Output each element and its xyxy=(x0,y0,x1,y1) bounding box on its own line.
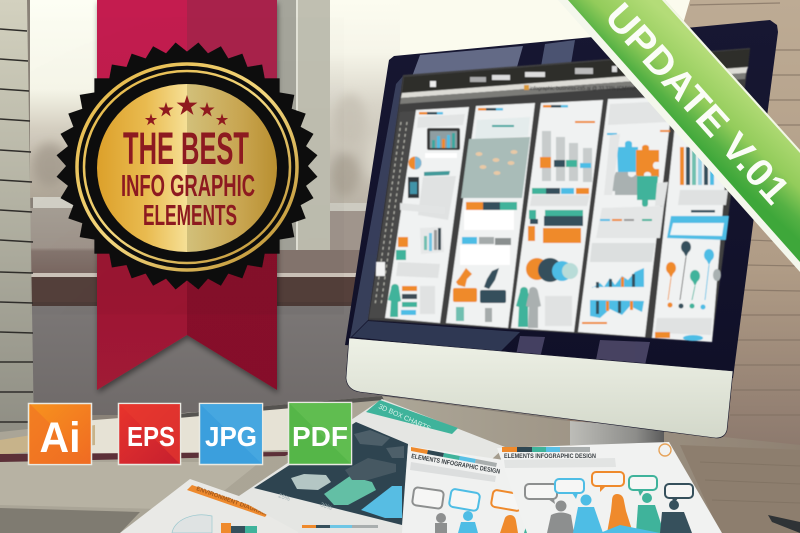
right wall with blinds xyxy=(560,0,800,445)
badge subheading: INFO GRAPHIC xyxy=(121,168,255,203)
bezel reflections xyxy=(350,40,650,365)
monitor xyxy=(345,20,778,438)
icon: PDF xyxy=(288,402,352,464)
hex boxes: 30% xyxy=(319,502,333,512)
speech bubbles xyxy=(525,472,693,504)
monitor stand xyxy=(570,421,664,446)
application toolbar: infographic-business-cs5.ai @ 33.33% (CMYK/Preview) xyxy=(530,86,654,92)
tools column xyxy=(369,111,415,318)
page 1 xyxy=(385,107,469,323)
colour stripes xyxy=(411,447,497,467)
icon: JPG xyxy=(200,404,262,464)
screen xyxy=(368,48,750,342)
colour stripes xyxy=(502,447,590,452)
icon: Ai: Ai xyxy=(40,414,80,462)
dark chart panel xyxy=(254,422,408,525)
puzzle pieces xyxy=(609,141,659,207)
application toolbar xyxy=(400,49,750,104)
gold rings xyxy=(77,64,297,270)
paper: middle people sheet xyxy=(402,446,540,533)
gold disc xyxy=(97,84,277,252)
page 4: puzzle xyxy=(578,97,673,337)
update banner xyxy=(558,0,800,272)
page 5: balloons xyxy=(652,97,732,342)
page 3 xyxy=(511,100,603,332)
paper: 3D box charts sheet xyxy=(236,399,505,533)
sheet header: 3D BOX CHARTS xyxy=(377,403,432,433)
sheet header xyxy=(366,400,458,434)
five stars xyxy=(145,95,228,125)
icon: EPS: EPS xyxy=(127,421,175,452)
badge xyxy=(57,42,317,290)
logo circle xyxy=(659,444,671,456)
people silhouettes xyxy=(547,493,692,533)
sheet heading: ELEMENTS INFOGRAPHIC DESIGN xyxy=(411,453,501,476)
hex boxes xyxy=(277,430,404,518)
icon: PDF: PDF xyxy=(292,421,348,452)
icon: EPS xyxy=(118,404,180,464)
people xyxy=(435,511,532,533)
icon: Ai xyxy=(28,404,92,464)
left sheet header: ENVIRONMENT DIAGRAM xyxy=(195,486,268,517)
hex boxes: 25% xyxy=(277,493,291,503)
ribbon upper xyxy=(97,0,277,160)
paper: right people sheet xyxy=(497,442,722,533)
monitor bezel xyxy=(345,20,778,378)
sheet heading: ELEMENTS INFOGRAPHIC DESIGN xyxy=(504,453,596,460)
banner text: UPDATE V.01 xyxy=(597,0,797,213)
ribbon xyxy=(97,0,277,390)
table xyxy=(0,396,800,533)
starburst seal xyxy=(57,42,317,290)
badge subheading line 2: ELEMENTS xyxy=(143,200,237,232)
speech bubbles xyxy=(412,487,523,511)
pen on table xyxy=(768,515,800,533)
badge heading: THE BEST xyxy=(123,123,249,174)
paper: bottom-centre sheet xyxy=(298,523,392,533)
left window blinds xyxy=(0,0,34,433)
page 2 xyxy=(446,103,535,328)
icon: JPG: JPG xyxy=(205,421,257,452)
notebook xyxy=(0,396,384,462)
paper: left corner chart sheet xyxy=(120,479,345,533)
monitor chin xyxy=(346,338,733,438)
